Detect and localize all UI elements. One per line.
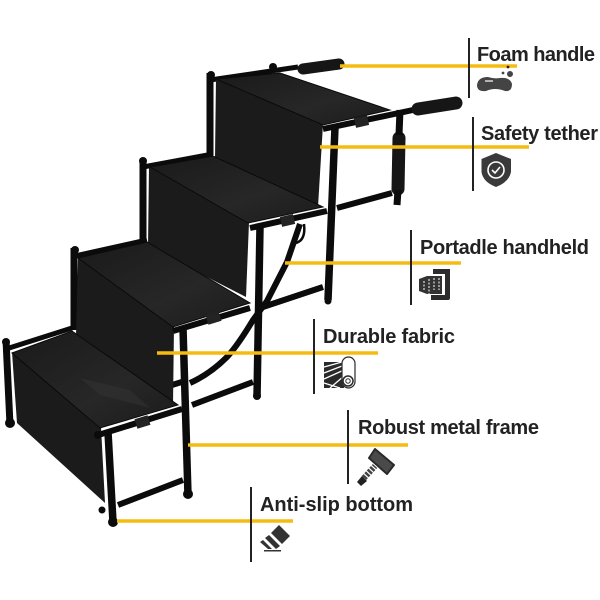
step 4 riser — [12, 352, 105, 503]
callout: robust metal frame: Robust metal frame — [358, 417, 539, 439]
icon: hammer — [357, 449, 394, 486]
callout: portable handheld: Portadle handheld — [420, 237, 589, 259]
back bars — [6, 67, 298, 349]
icon: hand grip — [419, 269, 450, 300]
callout: foam handle: Foam handle — [477, 44, 595, 66]
icon: fabric roll — [324, 357, 355, 388]
foam handles — [303, 64, 456, 205]
front legs — [94, 127, 335, 527]
icon: eraser — [260, 525, 290, 552]
callout: robust metal frame — [188, 410, 539, 486]
icon: shield — [482, 153, 511, 187]
callout: durable fabric: Durable fabric — [323, 326, 455, 348]
front bars — [95, 110, 413, 436]
step 3 tread — [78, 242, 250, 327]
folding pet stairs product — [2, 63, 456, 527]
step 3 riser — [76, 257, 174, 405]
step 2 riser — [148, 166, 249, 297]
rear posts — [2, 63, 277, 428]
rear cross bars and strap — [118, 193, 392, 505]
callout: foam handle — [340, 38, 595, 98]
callout: anti-slip bottom: Anti-slip bottom — [260, 494, 413, 516]
callout: safety tether: Safety tether — [481, 123, 598, 145]
callout: durable fabric — [157, 319, 455, 394]
callout: anti-slip bottom — [117, 487, 413, 562]
step 1 riser — [215, 78, 323, 207]
bar clips — [136, 120, 368, 424]
step 4 tread — [12, 331, 178, 428]
tread highlights — [80, 378, 150, 408]
callout: portable handheld — [285, 230, 589, 305]
icon: soap — [477, 66, 513, 91]
step 2 tread — [150, 156, 323, 223]
step 1 tread — [216, 73, 390, 125]
callout: safety tether — [320, 117, 598, 191]
